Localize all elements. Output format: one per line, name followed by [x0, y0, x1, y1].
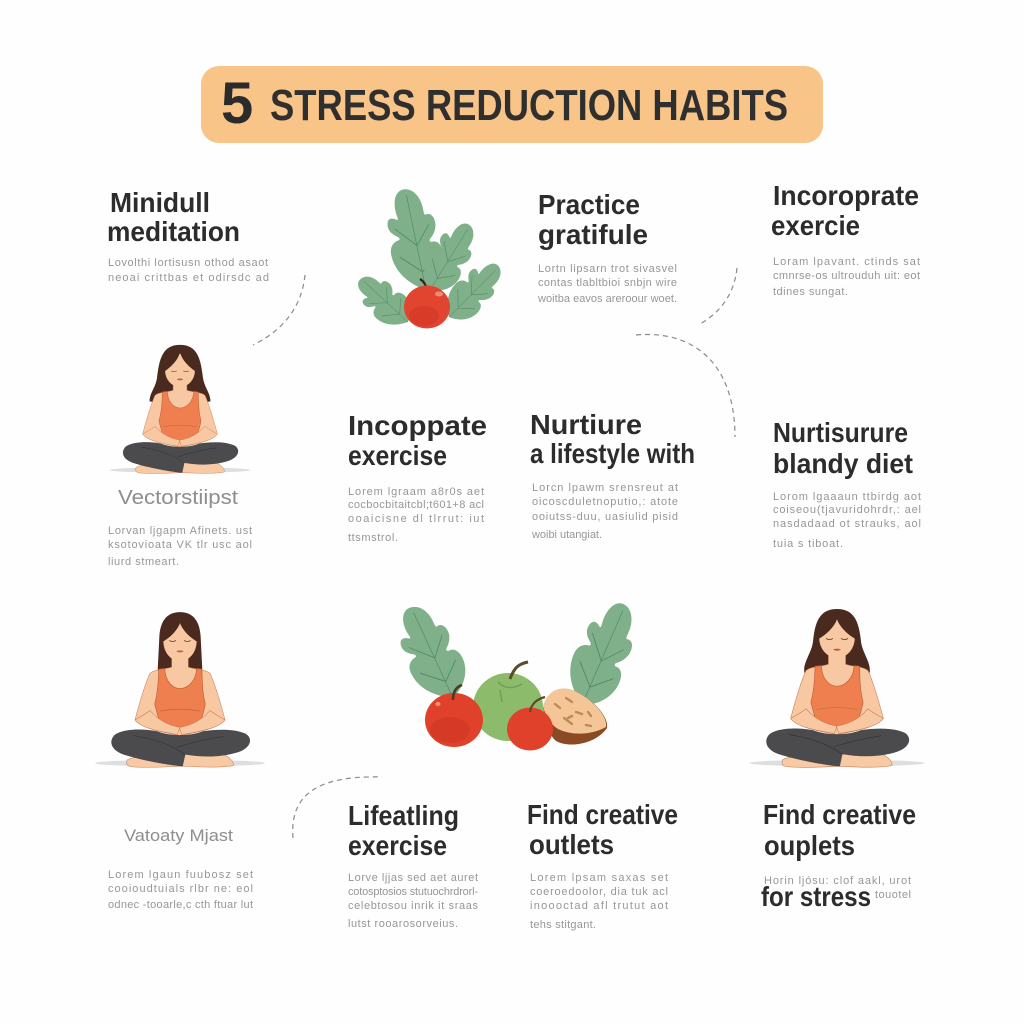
- dashed connector: top right: [700, 268, 737, 324]
- text block: nurture healthy diet: Nurtisurure: [773, 417, 908, 448]
- text block: lifelong exercise: lutst rooarosorveius.: [348, 918, 458, 930]
- text block: nurture healthy diet: Lorom lgaaaun ttbirdg aot: [773, 491, 921, 503]
- text block: lifelong exercise: exercise: [348, 830, 447, 861]
- text block: lifelong exercise: Lifeatling: [348, 800, 459, 831]
- text block: incorporate exercise top: Loram lpavant. ctinds sat: [773, 256, 920, 268]
- text block: nurture a lifestyle: oicoscduletnoputio,: atote: [532, 496, 678, 508]
- text block: nurture healthy diet: tuia s tiboat.: [773, 538, 843, 550]
- text block: incorporate exercise middle: Incoppate: [348, 410, 487, 441]
- text block: incorporate exercise top: cmnrse-os ultrouduh uit: eot: [773, 270, 920, 282]
- text block: nurture healthy diet: coiseou(tjavuridohrdr,: ael: [773, 504, 921, 516]
- text block: find creative outlets for stress: [761, 799, 916, 912]
- text block: mindful meditation: [107, 187, 269, 284]
- text block: incorporate exercise middle: cocbocbitaitcbl;t601+8 acl: [348, 499, 484, 511]
- text block: nurture a lifestyle: woibi utangiat.: [531, 529, 602, 541]
- text block: find creative outlets for stress: Find creative: [763, 799, 916, 830]
- text block: find creative outlets for stress: ouplets: [764, 830, 855, 861]
- title banner: STRESS REDUCTION HABITS: [270, 81, 788, 130]
- text block: practice gratitude: Practice: [538, 189, 640, 220]
- text block: nurture healthy diet: blandy diet: [773, 448, 913, 479]
- title banner: 5: [221, 71, 253, 136]
- text block: vector tips: Vectorstiipst: [118, 487, 238, 509]
- text block: find creative outlets for stress: Horin ljósu: clof aakl, urot: [764, 875, 911, 887]
- text block: practice gratitude: gratifule: [538, 219, 648, 250]
- text block: vector tips: ksotovioata VK tlr usc aol: [108, 539, 252, 551]
- text block: find creative outlets: Lorem lpsam saxas set: [530, 872, 668, 884]
- text block: practice gratitude: contas tlabltbioi snbjn wire: [538, 277, 677, 289]
- text block: vector tips bottom: cooioudtuials rlbr ne: eol: [108, 883, 253, 895]
- text block: find creative outlets for stress: for stress: [761, 881, 871, 912]
- illustration: meditating woman bottom left: [95, 612, 265, 767]
- text block: find creative outlets: coeroedoolor, dia tuk acl: [530, 886, 668, 898]
- text block: nurture a lifestyle: Lorcn lpawm srensreut at: [532, 482, 678, 494]
- text block: incorporate exercise middle: exercise: [348, 440, 447, 471]
- text block: lifelong exercise: Lorve ljjas sed aet auret: [348, 872, 478, 884]
- text block: lifelong exercise: [348, 800, 478, 930]
- text block: vector tips: liurd stmeart.: [108, 556, 179, 568]
- text block: incorporate exercise middle: [348, 410, 487, 544]
- text block: find creative outlets: outlets: [529, 829, 614, 860]
- text block: mindful meditation: Minidull: [110, 187, 210, 218]
- text block: vector tips bottom: [108, 826, 253, 911]
- text block: incorporate exercise middle: ooaicisne dl tlrrut: iut: [348, 513, 484, 525]
- text block: vector tips bottom: Vatoaty Mjast: [124, 826, 233, 845]
- text block: incorporate exercise top: [771, 180, 920, 298]
- text block: practice gratitude: woitba eavos areroour woet.: [537, 293, 677, 305]
- dashed connector: middle right: [636, 334, 735, 437]
- text block: nurture healthy diet: [773, 417, 921, 550]
- text block: nurture a lifestyle: ooiutss-duu, uasiulid pisid: [532, 511, 678, 523]
- text block: practice gratitude: Lortn lipsarn trot sivasvel: [538, 263, 677, 275]
- text block: vector tips bottom: Lorem lgaun fuubosz set: [108, 869, 253, 881]
- text block: find creative outlets: tehs stitgant.: [530, 919, 596, 931]
- illustration: leaves and apple: [349, 184, 512, 336]
- text block: incorporate exercise top: exercie: [771, 210, 860, 241]
- text block: mindful meditation: Lovolthi lortisusn othod asaot: [108, 257, 268, 269]
- illustration: meditating woman bottom right: [749, 609, 925, 767]
- text block: lifelong exercise: cotosptosios stutuochrdrorl-: [348, 886, 478, 898]
- text block: find creative outlets for stress: touotel: [875, 889, 911, 901]
- dashed connector: top left: [253, 275, 305, 345]
- text block: find creative outlets: [527, 799, 678, 931]
- text block: nurture a lifestyle: a lifestyle with: [530, 438, 695, 469]
- text block: nurture healthy diet: nasdadaad ot strauks, aol: [773, 518, 921, 530]
- text block: incorporate exercise middle: ttsmstrol.: [348, 532, 398, 544]
- text block: incorporate exercise top: Incoroprate: [773, 180, 919, 211]
- text block: practice gratitude: [537, 189, 677, 305]
- text block: lifelong exercise: celebtosou inrik it sraas: [348, 900, 478, 912]
- text block: incorporate exercise top: tdines sungat.: [773, 286, 848, 298]
- text block: find creative outlets: inoooctad afl trutut aot: [530, 900, 668, 912]
- text block: vector tips bottom: odnec -tooarle,c cth ftuar lut: [108, 899, 253, 911]
- text block: mindful meditation: neoai crittbas et odirsdc ad: [108, 272, 269, 284]
- dashed connector: bottom: [293, 777, 382, 838]
- illustration: leaves and fruit group: [387, 594, 650, 750]
- text block: nurture a lifestyle: Nurtiure: [530, 409, 642, 440]
- text block: nurture a lifestyle: [530, 409, 695, 541]
- text block: find creative outlets: Find creative: [527, 799, 678, 830]
- text block: vector tips: [108, 487, 252, 568]
- illustration: meditating woman top left: [109, 345, 251, 473]
- text block: vector tips: Lorvan ljgapm Afinets. ust: [108, 525, 252, 537]
- title banner: [201, 66, 823, 143]
- text block: mindful meditation: meditation: [107, 216, 240, 247]
- text block: incorporate exercise middle: Lorem lgraam a8r0s aet: [348, 486, 484, 498]
